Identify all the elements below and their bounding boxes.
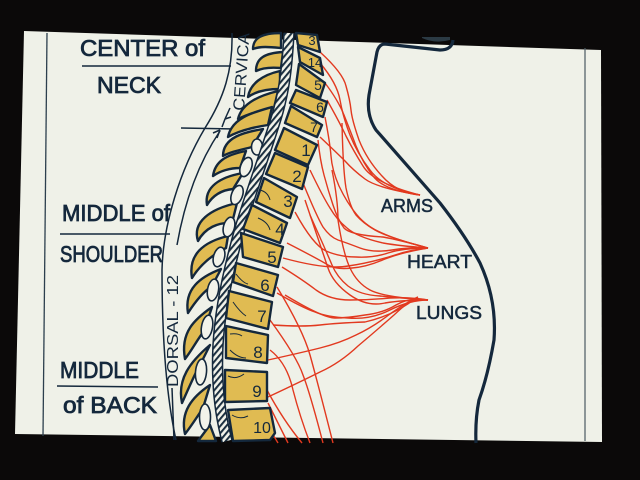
heading: middle of back: of BACK — [63, 392, 158, 418]
vertebra numbers: 1 — [301, 141, 311, 160]
label: dorsal 12: DORSAL - 12 — [165, 275, 182, 387]
vertebra numbers: 7 — [310, 119, 318, 135]
vertebra cracks — [228, 190, 270, 418]
spinous processes — [181, 33, 283, 441]
vertebral bodies — [225, 33, 327, 441]
label: cervical: CERVICA — [231, 32, 253, 111]
label: arms: ARMS — [381, 196, 433, 216]
heading: middle of shoulder: MIDDLE of — [62, 200, 171, 226]
frame line: left — [43, 33, 47, 436]
vertebra numbers: 6 — [260, 276, 270, 295]
vertebra numbers: 9 — [252, 382, 262, 401]
vertebra numbers: 3 — [308, 33, 316, 48]
label: heart: HEART — [407, 252, 472, 272]
nerves to arms — [320, 52, 420, 195]
bracket lines: cervical and dorsal ranges — [162, 33, 236, 440]
vertebra numbers: 14 — [308, 55, 322, 70]
nerves to heart — [283, 117, 428, 269]
nerves: descending — [267, 287, 333, 443]
articular processes — [194, 139, 262, 430]
chin mark — [422, 37, 450, 42]
vertebra numbers: 4 — [275, 220, 285, 239]
nerves to lungs — [268, 170, 428, 397]
vertebra numbers: 10 — [253, 420, 271, 437]
label: lungs: LUNGS — [416, 303, 482, 323]
vertebra numbers: 5 — [267, 248, 277, 267]
vertebra numbers: 8 — [253, 343, 263, 362]
vertebra numbers: 3 — [283, 192, 293, 211]
vertebra numbers: 6 — [316, 99, 324, 115]
heading: center of neck: CENTER of — [80, 35, 206, 61]
heading: middle of shoulder — [60, 200, 171, 267]
heading: center of neck: NECK — [97, 72, 162, 98]
spinal cord — [217, 33, 289, 441]
heading: center of neck — [80, 35, 231, 98]
vertebra numbers: 5 — [314, 77, 322, 93]
paper sheet — [15, 31, 602, 442]
heading: middle of back — [57, 357, 158, 418]
vertebra numbers: 2 — [292, 167, 302, 186]
heading: middle of back: MIDDLE — [60, 357, 139, 383]
vertebra numbers — [252, 33, 324, 437]
body outline — [368, 40, 494, 443]
vertebra numbers: 7 — [257, 307, 267, 326]
frame line: right — [584, 48, 586, 441]
heading: middle of shoulder: SHOULDER — [60, 241, 163, 267]
